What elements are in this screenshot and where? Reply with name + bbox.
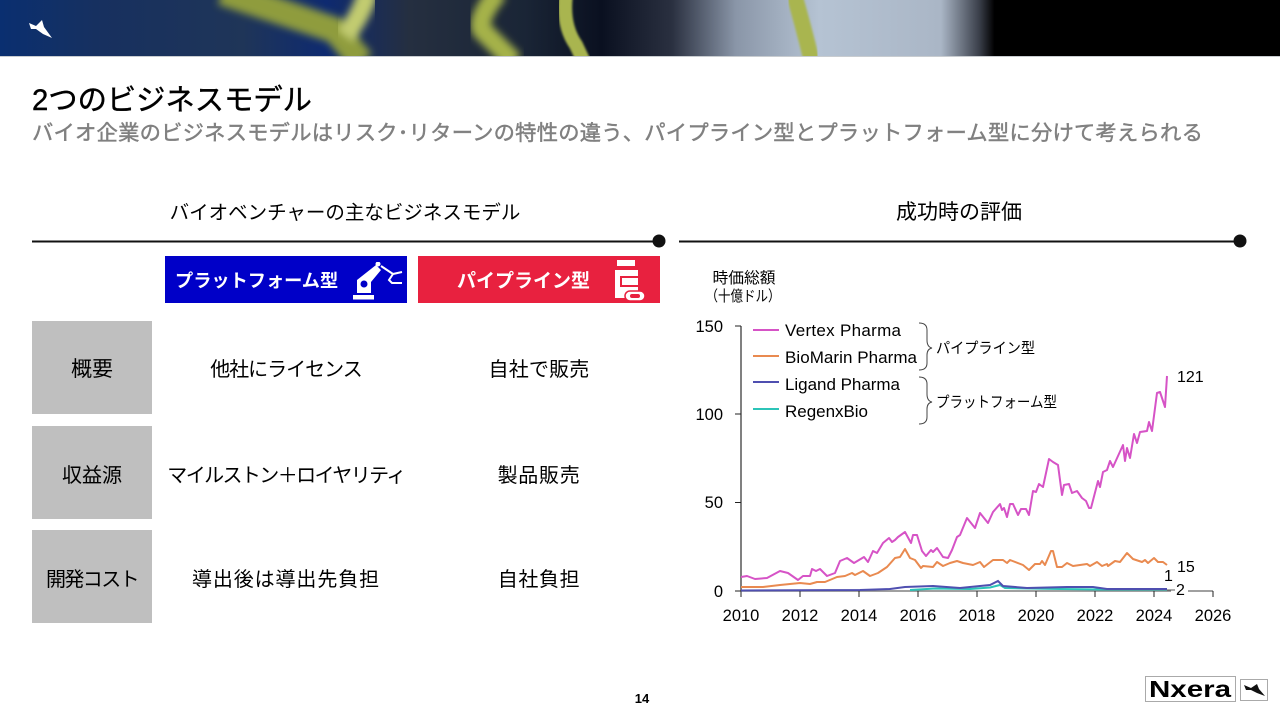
Vertex line [741, 376, 1167, 580]
header banner image [0, 0, 1280, 57]
pipeline overview: 自社で販売 [488, 359, 590, 381]
row label: overview [32, 321, 152, 414]
x axis labels: 2014 [841, 607, 877, 625]
y axis labels: 100 [695, 406, 723, 424]
market cap line chart [695, 269, 1231, 625]
right section rule [679, 234, 1246, 248]
legend [753, 321, 918, 421]
row label: development cost: 開発コスト [46, 568, 138, 590]
platform header badge: プラットフォーム型 [175, 271, 338, 291]
title: 2つのビジネスモデル [32, 84, 312, 117]
x axis labels: 2012 [782, 607, 818, 625]
footer logo [1145, 676, 1268, 702]
row label: overview: 概要 [71, 358, 113, 380]
x axis labels: 2020 [1018, 607, 1054, 625]
platform header badge [165, 256, 407, 303]
y axis labels [695, 318, 723, 601]
x axis labels [723, 607, 1231, 625]
x axis labels: 2010 [723, 607, 759, 625]
platform overview: 他社にライセンス [210, 359, 362, 381]
x axis labels: 2016 [900, 607, 936, 625]
x axis labels: 2026 [1195, 607, 1231, 625]
bracket: platform type [919, 377, 1057, 424]
left section heading: バイオベンチャーの主なビジネスモデル [170, 202, 520, 224]
x axis labels: 2024 [1136, 607, 1172, 625]
y axis title: （十億ドル） [706, 288, 780, 305]
y axis title: 時価総額 [712, 269, 776, 287]
platform cost: 導出後は導出先負担 [192, 569, 380, 591]
RegenxBio line [910, 585, 1167, 590]
legend: Ligand Pharma [785, 375, 901, 394]
end value labels: 121 [1177, 369, 1204, 386]
axes [735, 326, 1213, 597]
end value labels: 15 [1177, 559, 1195, 576]
x axis labels: 2022 [1077, 607, 1113, 625]
legend: Vertex Pharma [785, 321, 902, 340]
end value labels: 2 [1176, 582, 1185, 599]
legend: RegenxBio [785, 402, 868, 421]
platform revenue: マイルストン＋ロイヤリティ [167, 465, 405, 487]
legend: BioMarin Pharma [785, 348, 918, 367]
pipeline revenue: 製品販売 [498, 465, 580, 487]
icon: robot arm [353, 262, 402, 300]
y axis labels: 150 [695, 318, 723, 336]
bracket: pipeline type [919, 323, 1035, 370]
end value labels [1164, 369, 1204, 599]
page number: 14 [635, 691, 649, 706]
pipeline header badge [418, 256, 660, 303]
bracket: pipeline type: パイプライン型 [936, 340, 1035, 357]
row label: revenue source: 収益源 [62, 464, 122, 486]
x axis labels: 2018 [959, 607, 995, 625]
pipeline cost: 自社負担 [498, 569, 580, 591]
row label: revenue source [32, 426, 152, 519]
y axis title [706, 269, 780, 305]
footer logo: Nxera [1149, 676, 1231, 702]
icon: medicine bottle [615, 260, 644, 300]
subtitle: バイオ企業のビジネスモデルはリスク･リターンの特性の違う、パイプライン型とプラットフォーム型に分けて考えられる [32, 121, 1203, 145]
right section heading: 成功時の評価 [896, 201, 1022, 224]
y axis labels: 0 [714, 583, 723, 601]
y axis labels: 50 [705, 494, 723, 512]
end value labels: 1 [1164, 568, 1173, 585]
left section rule [32, 234, 666, 248]
pipeline header badge: パイプライン型 [457, 271, 590, 292]
Ligand line [741, 581, 1167, 590]
BioMarin line [741, 549, 1167, 587]
bracket: platform type: プラットフォーム型 [936, 394, 1057, 411]
row label: development cost [32, 530, 152, 623]
header logo mark [29, 20, 52, 38]
